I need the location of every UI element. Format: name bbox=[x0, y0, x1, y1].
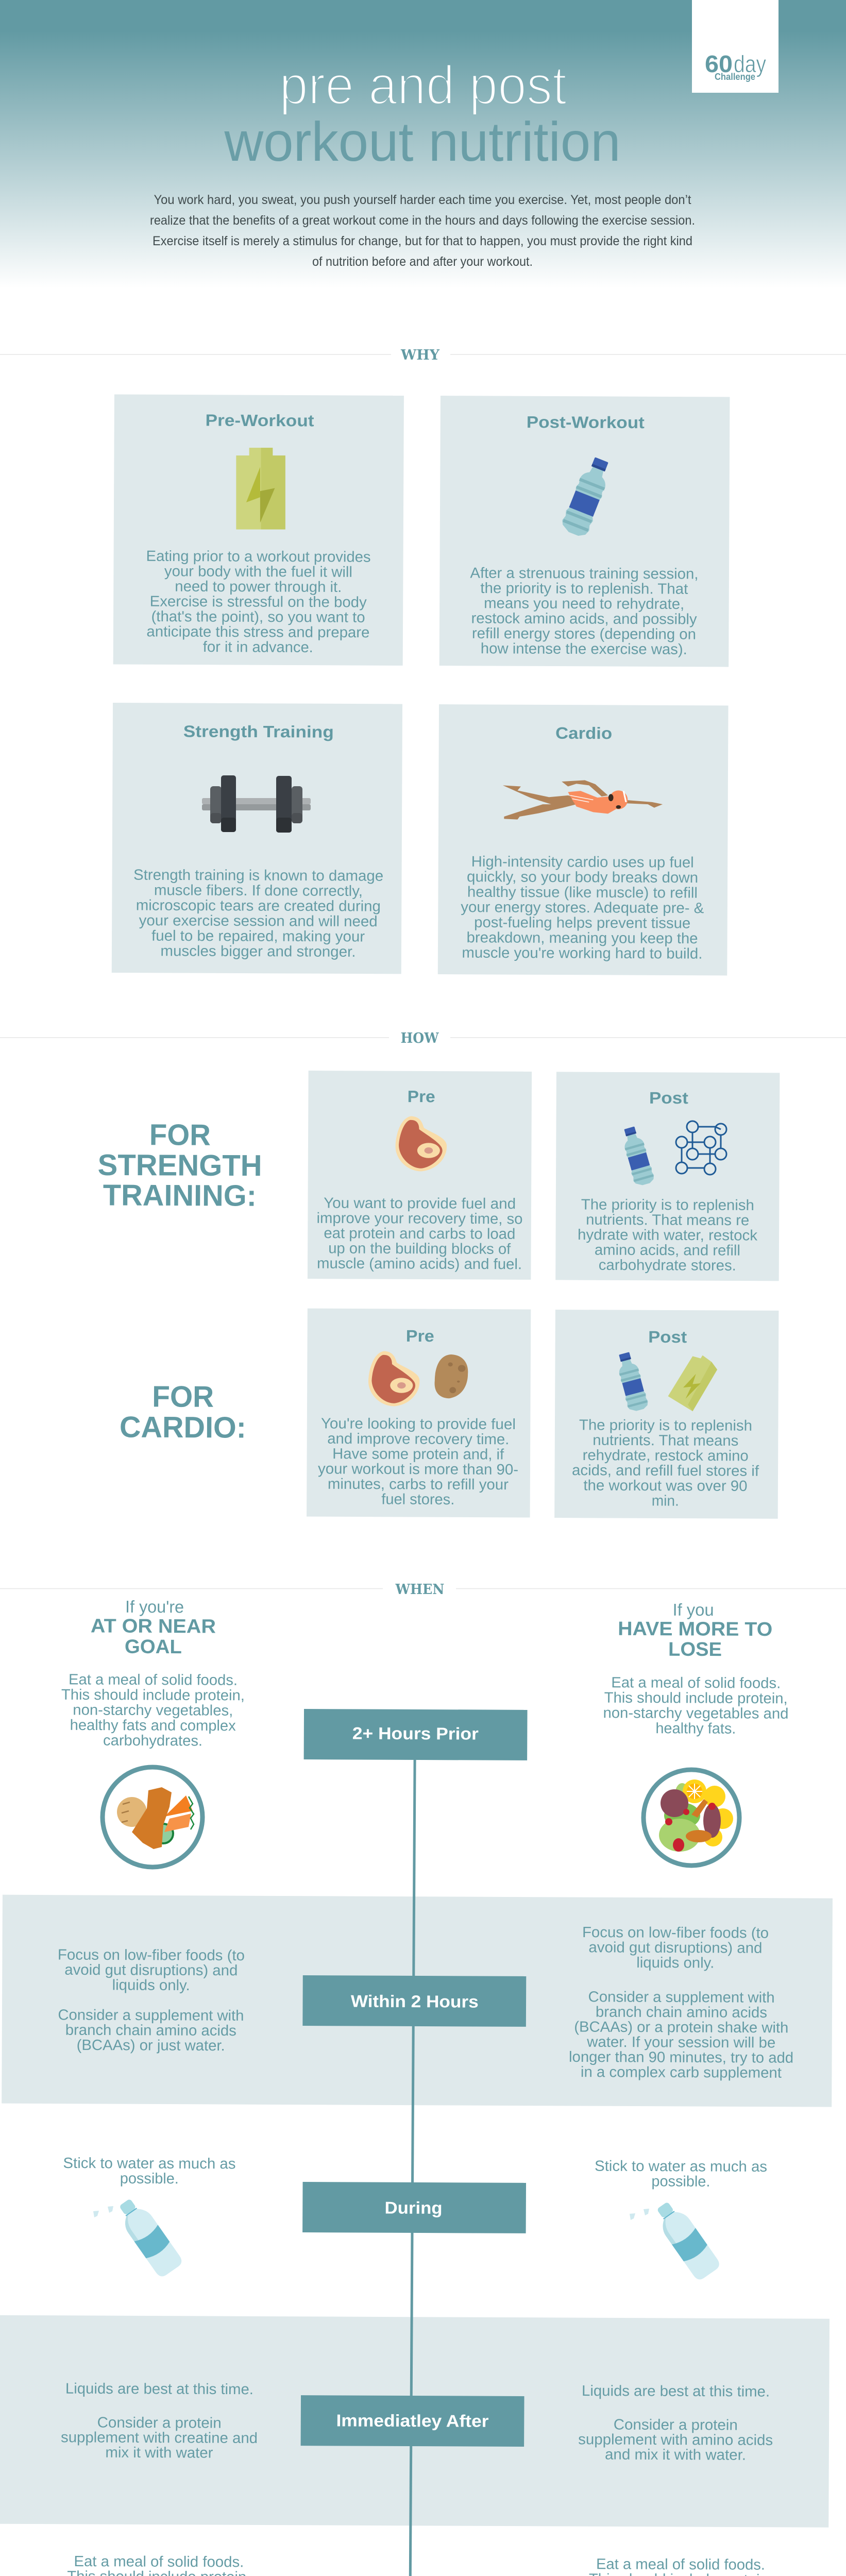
text: immediately after, lose: and mix it with water. bbox=[605, 2446, 746, 2464]
text: cardio post description: the workout was over 90 bbox=[583, 1478, 747, 1495]
text: pre-workout description bbox=[146, 548, 371, 656]
text: strength pre description: eat protein and carbs to load bbox=[324, 1225, 515, 1243]
timeline label: within 2 hours bbox=[302, 1975, 526, 2027]
heading: post: Post bbox=[648, 1328, 687, 1346]
text: within 2 hours, lose: liquids only. bbox=[636, 1955, 714, 1971]
audience heading: at or near goal: AT OR NEAR bbox=[91, 1615, 216, 1637]
text: 2+ hours prior, goal bbox=[61, 1671, 245, 1750]
text: within 2 hours, lose bbox=[569, 1924, 794, 2081]
text: within 2 hours, goal: (BCAAs) or just water. bbox=[77, 2037, 225, 2054]
timeline label: immediately after: Immediatley After bbox=[336, 2411, 489, 2431]
text: 2+ hours prior, lose: healthy fats. bbox=[655, 1720, 736, 1737]
text: 2+ hours prior, lose: This should include protein, bbox=[604, 1690, 788, 1707]
timeline label: during: During bbox=[385, 2198, 443, 2217]
text: strength pre description: You want to provide fuel and bbox=[324, 1195, 516, 1212]
text: within 2 hours, lose: Focus on low-fiber foods (to bbox=[582, 1924, 769, 1942]
text: strength post description: amino acids, and refill bbox=[595, 1242, 740, 1259]
text: post-workout description: refill energy stores (depending on bbox=[472, 625, 696, 643]
icon: plate with salad bbox=[644, 1770, 739, 1866]
text: cardio description: muscle you're working hard to build. bbox=[462, 945, 703, 962]
text: post-workout description: means you need to rehydrate, bbox=[484, 595, 684, 613]
icon: squirting water bottle, goal bbox=[93, 2194, 184, 2279]
icon: water bottle bbox=[559, 454, 615, 539]
band: within 2 hours background bbox=[2, 1895, 833, 2107]
text: pre-workout description: for it in advance. bbox=[203, 639, 313, 656]
panel: cardio post bbox=[554, 1310, 779, 1519]
icon: plate with chicken and vegetables bbox=[103, 1767, 202, 1867]
icon: amino acid molecule bbox=[676, 1121, 726, 1175]
text: within 2 hours, goal: avoid gut disruptions) and bbox=[64, 1962, 238, 1979]
text: cardio pre description: and improve recovery time. bbox=[327, 1431, 509, 1448]
text: cardio post description: acids, and refill fuel stores if bbox=[572, 1462, 759, 1480]
title: pre and post bbox=[279, 54, 567, 116]
text: during, lose: Stick to water as much as bbox=[595, 2158, 767, 2175]
text: immediately after, lose: supplement with amino acids bbox=[578, 2431, 773, 2449]
text: post-workout description: how intense the exercise was). bbox=[481, 640, 687, 658]
text: 2+ hours prior, lose bbox=[603, 1674, 789, 1737]
text: 2+ hours prior, lose: non-starchy vegetables and bbox=[603, 1705, 789, 1722]
text: cardio pre description bbox=[318, 1415, 519, 1509]
header gradient background bbox=[0, 0, 846, 294]
audience heading: have more to lose: HAVE MORE TO bbox=[618, 1618, 772, 1640]
text: cardio pre description: your workout is more than 90- bbox=[318, 1461, 518, 1478]
panel: cardio bbox=[438, 704, 729, 975]
text: 2+ hours prior, goal: carbohydrates. bbox=[103, 1733, 202, 1749]
heading: cardio: Cardio bbox=[555, 724, 612, 742]
panel: post-workout bbox=[439, 396, 730, 667]
audience heading: at or near goal bbox=[91, 1597, 216, 1658]
logo badge: 60 day challenge: Challenge bbox=[715, 72, 755, 82]
title bbox=[224, 54, 620, 173]
text: strength training description: your exercise session and will need bbox=[139, 912, 378, 930]
text: within 2 hours, lose: Consider a supplement with bbox=[588, 1989, 775, 2006]
text: pre-workout description: anticipate this stress and prepare bbox=[146, 623, 370, 641]
audience heading: have more to lose: If you bbox=[672, 1600, 714, 1619]
icon: steak bbox=[368, 1351, 419, 1406]
text: within 2 hours, lose: water. If your session will be bbox=[586, 2034, 775, 2051]
text: cardio post description: nutrients. That means bbox=[593, 1432, 738, 1449]
heading: post: Post bbox=[649, 1089, 688, 1107]
text: cardio pre description: Have some protein and, if bbox=[332, 1446, 504, 1463]
heading: for strength training: TRAINING: bbox=[103, 1178, 257, 1213]
timeline label: immediately after bbox=[301, 2395, 524, 2447]
text: 2+ hours prior, goal: This should include protein, bbox=[61, 1687, 245, 1704]
text: cardio post description: rehydrate, restock amino bbox=[583, 1447, 749, 1464]
intro text: You work hard, you sweat, you push yourself harder each time you exercise. Yet, most people don’t bbox=[154, 193, 691, 207]
text: strength training description: fuel to be repaired, making your bbox=[151, 928, 365, 945]
panel: strength pre bbox=[308, 1071, 532, 1280]
text: post-workout description bbox=[470, 565, 699, 658]
text: cardio description: High-intensity cardio uses up fuel bbox=[471, 854, 694, 871]
text: immediately after, goal: mix it with water bbox=[105, 2445, 213, 2462]
panel: strength post bbox=[555, 1072, 780, 1281]
logo badge: 60 day challenge: day bbox=[734, 50, 766, 77]
text: strength pre description: muscle (amino acids) and fuel. bbox=[317, 1256, 522, 1273]
timeline label: within 2 hours: Within 2 Hours bbox=[351, 1992, 479, 2011]
icon: water bottle bbox=[619, 1125, 656, 1187]
icon: steak bbox=[396, 1116, 447, 1171]
heading: pre-workout: Pre-Workout bbox=[205, 411, 314, 430]
text: cardio pre description: minutes, carbs to refill your bbox=[328, 1476, 509, 1493]
audience heading: at or near goal: GOAL bbox=[125, 1636, 182, 1658]
text: 1+ hours after, goal: Eat a meal of solid foods. bbox=[74, 2553, 244, 2570]
text: immediately after, goal: supplement with creatine and bbox=[61, 2429, 258, 2447]
heading: pre: Pre bbox=[406, 1327, 434, 1345]
section heading: how: HOW bbox=[401, 1030, 439, 1046]
text: immediately after, lose: Liquids are best at this time. bbox=[582, 2383, 770, 2400]
icon: squirting water bottle, lose bbox=[630, 2197, 722, 2282]
title: workout nutrition bbox=[224, 110, 620, 173]
text: post-workout description: restock amino acids, and possibly bbox=[471, 611, 697, 628]
icon: water bottle bbox=[614, 1351, 650, 1413]
text: within 2 hours, lose: longer than 90 minutes, try to add bbox=[569, 2049, 793, 2066]
text: during, lose bbox=[595, 2158, 767, 2190]
icon: potato bbox=[435, 1354, 468, 1398]
logo badge: 60 day challenge bbox=[692, 0, 779, 93]
text: within 2 hours, goal: Consider a supplement with bbox=[58, 2007, 244, 2024]
text: 2+ hours prior, lose: Eat a meal of solid foods. bbox=[611, 1674, 781, 1692]
text: cardio post description: The priority is to replenish bbox=[579, 1417, 752, 1434]
text: pre-workout description: your body with the fuel it will bbox=[164, 563, 352, 581]
text: pre-workout description: (that's the point), so you want to bbox=[151, 608, 365, 626]
text: strength pre description: improve your recovery time, so bbox=[316, 1210, 523, 1227]
heading: for cardio: FOR bbox=[152, 1380, 214, 1414]
section heading: why: WHY bbox=[400, 347, 440, 363]
heading: for strength training: FOR bbox=[149, 1118, 211, 1152]
icon: dumbbell bbox=[202, 775, 311, 833]
text: within 2 hours, lose: avoid gut disruptions) and bbox=[588, 1939, 762, 1957]
text: pre-workout description: Exercise is stressful on the body bbox=[150, 594, 367, 611]
text: strength post description: carbohydrate stores. bbox=[599, 1257, 736, 1274]
text: 2+ hours prior, goal: Eat a meal of solid foods. bbox=[69, 1671, 238, 1689]
intro text bbox=[150, 193, 695, 269]
heading: for strength training bbox=[97, 1118, 262, 1213]
text: immediately after, goal: Liquids are best at this time. bbox=[65, 2381, 253, 2398]
text: 2+ hours prior, goal: non-starchy vegetables, bbox=[73, 1702, 233, 1719]
band: immediately after background bbox=[0, 2315, 830, 2528]
audience heading: at or near goal: If you're bbox=[125, 1597, 184, 1616]
text: cardio description: your energy stores. Adequate pre- & bbox=[461, 899, 704, 917]
icon: energy gel packet bbox=[668, 1355, 717, 1411]
text: during, goal: possible. bbox=[120, 2171, 179, 2187]
text: cardio pre description: fuel stores. bbox=[381, 1491, 454, 1508]
text: strength training description: Strength training is known to damage bbox=[133, 867, 383, 885]
timeline label: during bbox=[302, 2182, 526, 2233]
text: strength pre description bbox=[316, 1195, 523, 1273]
text: within 2 hours, goal: Focus on low-fiber foods (to bbox=[58, 1947, 245, 1964]
logo badge: 60 day challenge: 60 bbox=[705, 50, 733, 77]
icon: battery bbox=[236, 448, 285, 530]
text: strength post description: The priority is to replenish bbox=[581, 1196, 754, 1214]
text: strength training description: muscles bigger and stronger. bbox=[160, 943, 356, 960]
intro text: Exercise itself is merely a stimulus for change, but for that to happen, you must provide the right kind bbox=[153, 234, 692, 248]
text: pre-workout description: Eating prior to a workout provides bbox=[146, 548, 371, 566]
text: cardio pre description: You're looking to provide fuel bbox=[321, 1415, 516, 1433]
text: post-workout description: After a strenuous training session, bbox=[470, 565, 699, 583]
text: strength pre description: up on the building blocks of bbox=[328, 1240, 511, 1258]
text: strength training description: microscopic tears are created during bbox=[136, 897, 381, 915]
timeline label: 2+ hours prior: 2+ Hours Prior bbox=[352, 1724, 479, 1743]
text: cardio post description bbox=[572, 1417, 759, 1510]
panel: pre-workout bbox=[113, 394, 404, 666]
timeline line bbox=[410, 1754, 415, 2576]
text: 1+ hours after, lose: Eat a meal of solid foods. bbox=[596, 2556, 765, 2573]
panel: strength training bbox=[112, 703, 402, 974]
text: cardio description: healthy tissue (like muscle) to refill bbox=[467, 884, 698, 902]
heading: for strength training: STRENGTH bbox=[97, 1148, 262, 1182]
text: within 2 hours, lose: (BCAAs) or a protein shake with bbox=[574, 2019, 788, 2036]
text: immediately after, lose bbox=[578, 2383, 773, 2464]
intro text: of nutrition before and after your workout. bbox=[312, 255, 533, 269]
text: within 2 hours, lose: branch chain amino acids bbox=[596, 2004, 767, 2021]
intro text: realize that the benefits of a great workout come in the hours and days following the exercise session. bbox=[150, 213, 695, 228]
section heading: when: WHEN bbox=[395, 1582, 444, 1598]
text: during, goal: Stick to water as much as bbox=[63, 2155, 236, 2172]
text: immediately after, goal bbox=[61, 2381, 258, 2462]
text: cardio post description: min. bbox=[652, 1493, 679, 1510]
text: cardio description: post-fueling helps prevent tissue bbox=[474, 914, 690, 932]
heading: post-workout: Post-Workout bbox=[527, 413, 645, 432]
audience heading: have more to lose bbox=[618, 1600, 772, 1661]
icon: swimmer bbox=[503, 780, 663, 820]
panel: cardio pre bbox=[307, 1309, 531, 1518]
text: 1+ hours after, goal bbox=[67, 2553, 250, 2576]
text: immediately after, goal: Consider a protein bbox=[97, 2415, 222, 2432]
text: strength training description bbox=[133, 867, 383, 960]
text: cardio description bbox=[461, 854, 704, 962]
text: strength post description: hydrate with water, restock bbox=[578, 1227, 758, 1244]
text: within 2 hours, goal: liquids only. bbox=[112, 1977, 190, 1994]
audience heading: have more to lose: LOSE bbox=[668, 1639, 722, 1660]
text: during, lose: possible. bbox=[651, 2173, 710, 2190]
text: within 2 hours, goal: branch chain amino acids bbox=[65, 2022, 236, 2039]
text: 2+ hours prior, goal: healthy fats and complex bbox=[70, 1717, 236, 1734]
text: cardio description: quickly, so your body breaks down bbox=[467, 869, 698, 886]
heading: strength training: Strength Training bbox=[183, 722, 334, 741]
text: post-workout description: the priority is to replenish. That bbox=[480, 580, 688, 598]
text: strength post description: nutrients. That means re bbox=[586, 1212, 749, 1229]
heading: for cardio bbox=[120, 1380, 246, 1445]
text: immediately after, lose: Consider a protein bbox=[614, 2417, 738, 2434]
text: pre-workout description: need to power through it. bbox=[175, 579, 342, 596]
timeline label: 2+ hours prior bbox=[304, 1709, 528, 1760]
text: strength post description bbox=[578, 1196, 758, 1274]
text: during, goal bbox=[63, 2155, 236, 2188]
text: within 2 hours, goal bbox=[57, 1947, 245, 2054]
heading: pre: Pre bbox=[408, 1087, 435, 1106]
text: strength training description: muscle fibers. If done correctly, bbox=[154, 882, 363, 900]
text: cardio description: breakdown, meaning you keep the bbox=[466, 929, 698, 947]
text: within 2 hours, lose: in a complex carb supplement bbox=[581, 2064, 782, 2081]
heading: for cardio: CARDIO: bbox=[120, 1411, 246, 1445]
